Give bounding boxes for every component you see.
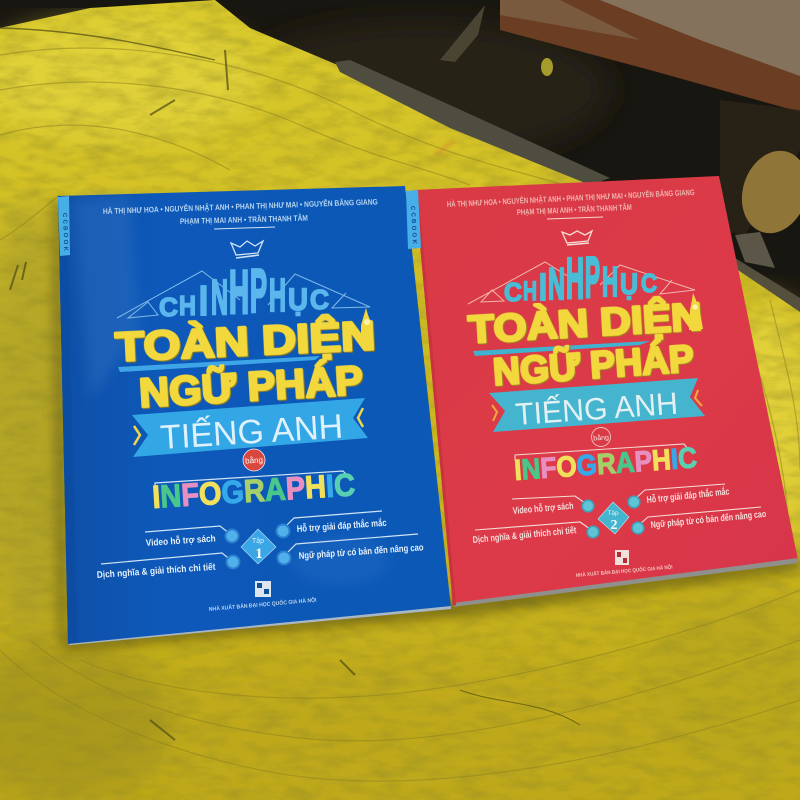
badge: bằng: bằng xyxy=(245,456,263,465)
heading: CHINH PHỤC: I xyxy=(539,267,547,309)
heading: CHINH PHỤC: C xyxy=(641,268,657,298)
publisher logo and name: NHÀ XUẤT BẢN ĐẠI HỌC QUỐC GIA HÀ NỘI xyxy=(575,563,673,579)
authors: HÀ THỊ NHƯ HOA • NGUYỄN NHẬT ANH • PHAN THỊ NHƯ MAI • NGUYỄN BĂNG GIANG xyxy=(103,197,378,216)
heading: CHINH PHỤC: N xyxy=(548,258,565,309)
spine tab CCBOOK xyxy=(406,190,421,249)
feature callouts: Hỗ trợ giải đáp thắc mắc xyxy=(646,485,730,506)
spine tab CCBOOK xyxy=(58,196,70,256)
feature callouts: Ngữ pháp từ có bản đến nâng cao xyxy=(298,542,424,562)
badge: Tập 1: 1 xyxy=(255,546,263,562)
authors: HÀ THỊ NHƯ HOA • NGUYỄN NHẬT ANH • PHAN THỊ NHƯ MAI • NGUYỄN BĂNG GIANG xyxy=(447,188,695,209)
badge: Tập 1 xyxy=(241,529,276,564)
heading: CHINH PHỤC: C xyxy=(310,284,329,315)
heading: CHINH PHỤC: Ụ xyxy=(288,281,308,317)
roof line art xyxy=(117,271,370,318)
blue book cover xyxy=(58,186,451,644)
icon: tower xyxy=(361,308,374,347)
feature callouts: Dịch nghĩa & giải thích chi tiết xyxy=(96,562,217,581)
badge: Tập 2 xyxy=(598,502,629,534)
heading: NGỮ PHÁP: NGỮ PHÁP xyxy=(492,336,695,394)
book shadows xyxy=(52,200,800,650)
heading: CHINH PHỤC xyxy=(159,257,329,327)
icon: crown xyxy=(231,241,263,258)
roof line art xyxy=(468,262,695,304)
badge: bằng: bằng xyxy=(593,432,609,443)
heading: CHINH PHỤC: N xyxy=(211,269,228,325)
heading: INFOGRAPHIC: INFOGRAPHIC xyxy=(513,442,698,487)
badge: bằng xyxy=(592,428,610,446)
feature callouts: Video hỗ trợ sách xyxy=(145,533,216,549)
heading: CHINH PHỤC xyxy=(504,245,657,311)
red book cover xyxy=(415,176,798,606)
badge: Tập 2: Tập xyxy=(607,510,619,517)
icon: crown xyxy=(562,231,592,245)
heading: TOÀN DIỆN: TOÀN DIỆN xyxy=(114,312,376,370)
heading: CHINH PHỤC: P xyxy=(585,245,600,310)
feature callouts: Dịch nghĩa & giải thích chi tiết xyxy=(472,525,577,546)
panel: red book volume 2 xyxy=(406,176,798,607)
publisher logo and name xyxy=(208,581,317,613)
heading: INFOGRAPHIC: INFOGRAPHIC xyxy=(151,466,356,515)
feature callouts: Hỗ trợ giải đáp thắc mắc xyxy=(296,517,387,535)
heading: CHINH PHỤC: H xyxy=(229,258,249,327)
badge: bằng xyxy=(243,449,265,471)
spine tab CCBOOK: CCBOOK xyxy=(61,213,68,252)
divider bar xyxy=(473,341,650,356)
connector bar xyxy=(515,444,688,460)
publisher logo and name xyxy=(575,550,673,579)
heading: CHINH PHỤC: H xyxy=(179,290,196,321)
connector bar xyxy=(155,471,348,490)
heading: CHINH PHỤC: H xyxy=(269,271,286,322)
heading: CHINH PHỤC: H xyxy=(566,246,584,311)
ribbon: TIẾNG ANH xyxy=(132,398,368,457)
authors xyxy=(447,188,695,219)
badge: Tập 2: 2 xyxy=(610,518,618,533)
cut log, right xyxy=(720,100,800,268)
panel: blue book volume 1 xyxy=(58,186,451,645)
heading: CHINH PHỤC: C xyxy=(504,277,522,307)
ribbon: TIẾNG ANH: TIẾNG ANH xyxy=(159,408,344,457)
badge: Tập 1: Tập xyxy=(252,538,264,545)
publisher logo and name: NHÀ XUẤT BẢN ĐẠI HỌC QUỐC GIA HÀ NỘI xyxy=(208,596,317,613)
icon: tower xyxy=(689,293,703,330)
wooden plank, top right xyxy=(500,0,800,112)
heading: CHINH PHỤC: P xyxy=(250,257,267,326)
feature callouts xyxy=(472,484,767,546)
ribbon: TIẾNG ANH: TIẾNG ANH xyxy=(514,386,679,432)
heading: NGỮ PHÁP: NGỮ PHÁP xyxy=(138,357,364,416)
feature callouts xyxy=(96,511,424,581)
authors: PHẠM THỊ MAI ANH • TRẦN THANH TÂM xyxy=(517,202,632,217)
heading: CHINH PHỤC: H xyxy=(523,276,537,306)
bark rim of the log xyxy=(335,60,800,312)
feature callouts: Video hỗ trợ sách xyxy=(512,501,574,517)
heading: CHINH PHỤC: C xyxy=(159,292,178,322)
divider bar xyxy=(118,356,320,372)
heading: TOÀN DIỆN: TOÀN DIỆN xyxy=(467,295,703,352)
authors xyxy=(103,197,378,229)
heading: CHINH PHỤC: H xyxy=(602,258,618,305)
spine tab CCBOOK: CCBOOK xyxy=(409,206,417,245)
heading: CHINH PHỤC: Ụ xyxy=(620,268,638,301)
authors: PHẠM THỊ MAI ANH • TRẦN THANH TÂM xyxy=(180,213,308,226)
heading: CHINH PHỤC: I xyxy=(199,277,208,324)
ribbon: TIẾNG ANH xyxy=(489,378,705,432)
